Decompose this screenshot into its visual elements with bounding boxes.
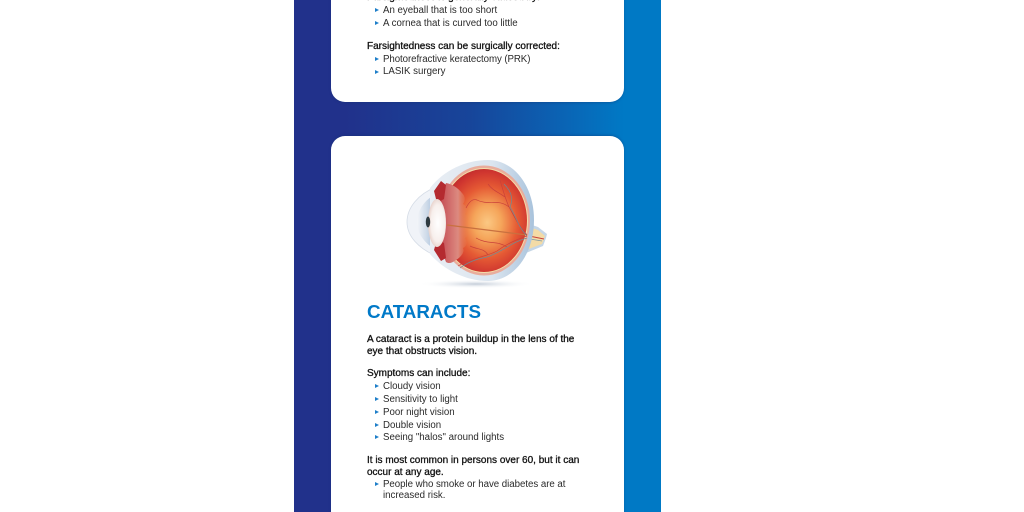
retina bbox=[441, 169, 527, 272]
list: causes: A cornea that is curved too little bbox=[383, 18, 518, 29]
background panel bbox=[294, 0, 661, 512]
text: cataract definition bbox=[366, 334, 574, 357]
list: symptoms: Sensitivity to light bbox=[383, 394, 458, 405]
text: age note: It is most common in persons over 60, but it can bbox=[367, 455, 579, 466]
panel: farsightedness card bbox=[331, 0, 624, 102]
list: risk factors: increased risk. bbox=[383, 490, 445, 501]
list: symptoms: Poor night vision bbox=[383, 407, 455, 418]
list: symptoms: Cloudy vision bbox=[383, 381, 441, 392]
list: causes bbox=[375, 5, 518, 29]
text: surgical correction heading: Farsightedness can be surgically corrected: bbox=[367, 41, 560, 52]
list: symptoms: Seeing "halos" around lights bbox=[383, 432, 504, 443]
ground shadow bbox=[418, 280, 534, 288]
cornea bbox=[407, 187, 436, 256]
list: risk factors: People who smoke or have diabetes are at bbox=[383, 479, 565, 490]
lens bbox=[428, 199, 446, 247]
text: cataract definition: eye that obstructs vision. bbox=[367, 346, 477, 357]
list: surgical options: Photorefractive keratectomy (PRK) bbox=[383, 54, 530, 65]
list: symptoms: Double vision bbox=[383, 420, 441, 431]
list: surgical options bbox=[375, 54, 530, 77]
sclera bbox=[430, 160, 534, 281]
heading: cataracts: CATARACTS bbox=[367, 301, 481, 322]
blood vessels bbox=[447, 180, 527, 268]
list: symptoms bbox=[375, 381, 504, 443]
text: cataract definition: A cataract is a protein buildup in the lens of the bbox=[367, 334, 574, 345]
ciliary body bbox=[438, 183, 469, 263]
text: age note: occur at any age. bbox=[367, 467, 444, 478]
icon: eye anatomy illustration bbox=[406, 160, 547, 287]
pupil bbox=[426, 216, 430, 228]
list: surgical options: LASIK surgery bbox=[383, 66, 445, 77]
optic nerve bbox=[524, 223, 547, 253]
list: causes: An eyeball that is too short bbox=[383, 5, 497, 16]
panel: cataracts card bbox=[331, 136, 624, 512]
text: age note bbox=[367, 455, 579, 478]
choroid band bbox=[438, 166, 530, 276]
text: symptoms heading: Symptoms can include: bbox=[367, 368, 470, 379]
list: risk factors bbox=[375, 479, 566, 501]
iris wedges bbox=[434, 181, 446, 261]
